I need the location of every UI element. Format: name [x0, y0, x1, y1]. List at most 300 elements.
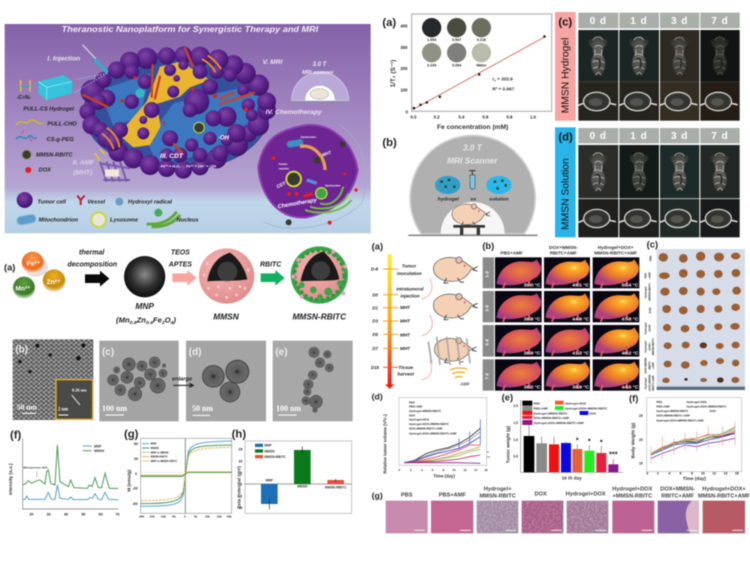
- panel c: MMSN hydrogel scans: (c): [558, 17, 572, 29]
- thermal image grid b: 38.9 °C: [572, 385, 589, 391]
- panel d: MMSN solution scans: [555, 127, 740, 237]
- metal ions: [13, 252, 65, 299]
- chart e: tumor weight: Hydrogel+DOX+MMSN-RBITC+AMF: [534, 421, 584, 425]
- chart g: magnetization: -15k: [149, 514, 155, 518]
- chart g: magnetization: MNP in MMSN: [151, 450, 169, 454]
- chart d: relative tumor volume: Hydrogel+MMSN-RBITC: [409, 409, 441, 413]
- chart h: zeta potential: -5: [239, 495, 242, 499]
- chart g: magnetization: MNP in MMSN-RBITC: [151, 459, 178, 463]
- chart h: zeta potential: 15: [238, 448, 242, 452]
- thermal image grid b: 47.8 °C: [622, 316, 639, 322]
- chart f: body weight: 0: [646, 472, 648, 476]
- chart f: XRD: MMSN: [94, 449, 105, 453]
- histology g: DOX: [535, 491, 547, 497]
- chart d: relative tumor volume: Time (day): [433, 474, 455, 479]
- histology g: Hydrogel+DOX+: [702, 486, 746, 492]
- chart d: relative tumor volume: Hydrogel+DOX+MMSN-RBITC+AMF: [409, 431, 457, 435]
- chart e: tumor weight: 1.0: [513, 438, 518, 442]
- legend: hydrogel components: -C=N-: [17, 95, 31, 101]
- chart d: relative tumor volume: PBS: [409, 400, 415, 404]
- timeline a: MHT: [400, 305, 411, 310]
- chart f: body weight: (f): [629, 394, 638, 404]
- chart g: magnetization: [124, 429, 232, 518]
- panel d: MMSN solution scans: 7 d: [711, 131, 729, 142]
- timeline a: harvest: [397, 372, 414, 377]
- histology g: RBITC+AMF: [661, 494, 695, 500]
- histology g: (g): [372, 490, 383, 500]
- mouse illustrations: [422, 257, 478, 387]
- chart e: tumor weight: *: [576, 435, 579, 444]
- chart f: body weight: DOX: [710, 409, 716, 413]
- panel c: MMSN hydrogel scans: 3 d: [671, 16, 688, 27]
- MNP sphere: O: [165, 315, 171, 324]
- thermal image grid b: 46.2 °C: [622, 350, 639, 356]
- MNP sphere: MNP: [135, 301, 154, 311]
- histology g: PBS: [401, 493, 413, 499]
- tumor photo c: MMSN-RBITC: [651, 338, 655, 355]
- step: thermal decomposition: decomposition: [67, 262, 117, 269]
- panel d: MMSN solution scans: 3 d: [671, 131, 688, 142]
- tumor photo c: -RBITC+AMF: [651, 375, 655, 391]
- thermal image grid b: MMSN-RBITC+AMF: [594, 250, 637, 255]
- chart h: zeta potential: 10: [238, 460, 242, 464]
- chart g: magnetization: MNP: [151, 442, 157, 446]
- step labels: (MHT): [73, 169, 93, 176]
- panel c: MMSN hydrogel scans: 7 d: [711, 16, 729, 27]
- chart a: relaxivity: Fe concentration (mM): [437, 124, 508, 131]
- tumor photo c: (c): [647, 240, 658, 250]
- MNP sphere: 4: [170, 320, 174, 326]
- chart f: body weight: Hydrogel+DOX+MMSN-RBITC: [687, 404, 727, 408]
- MMSN particle: [199, 248, 254, 322]
- chart d: relative tumor volume: 16: [484, 468, 488, 472]
- chart f: body weight: PBS: [656, 400, 662, 404]
- chart g: magnetization: MMSN: [151, 446, 159, 450]
- chart h: zeta potential: -10: [237, 506, 242, 510]
- chart h: zeta potential: 0: [240, 483, 242, 487]
- chart e: tumor weight: Hydrogel+MMSN-RBITC: [534, 411, 568, 415]
- legend: cell components: Vessel: [87, 199, 105, 205]
- chart a: relaxivity: R² = 0.997: [492, 87, 515, 92]
- label a: (a): [4, 263, 15, 273]
- timeline a: [371, 242, 424, 389]
- thermal image grid b: 1 d: [484, 271, 489, 277]
- chart d: relative tumor volume: Relative tumor volume (V/V₀): [382, 414, 387, 474]
- chart a: relaxivity: (a): [382, 17, 396, 29]
- step labels: III. CDT: [160, 153, 184, 160]
- chart a: relaxivity: 0.0: [410, 115, 417, 120]
- MNP sphere: 0.4: [146, 320, 153, 326]
- chart e: tumor weight: PBS: [534, 401, 540, 405]
- MNP sphere: Zn: [136, 315, 146, 324]
- chart d: relative tumor volume: 14: [474, 468, 478, 472]
- chart d: relative tumor volume: **: [487, 450, 490, 454]
- chart g: magnetization: 20k: [227, 514, 232, 518]
- thermal image grid b: 38.8 °C: [524, 316, 541, 322]
- tumor photo c: +DOX+: [647, 342, 651, 351]
- chart e: tumor weight: DOX: [590, 411, 596, 415]
- histology g: Hydrogel+DOX: [612, 486, 653, 492]
- panel: MRI results: [382, 12, 740, 237]
- timeline a: MHT: [400, 332, 411, 337]
- icon: syringe: [73, 45, 107, 93]
- tumor illustration: ·OH: [218, 135, 230, 141]
- histology g: DOX+MMSN-: [660, 486, 695, 492]
- chart h: zeta potential: (h): [232, 429, 246, 441]
- title: Theranostic Nanoplatform for Synergistic Therapy and MRI: [62, 24, 319, 34]
- chart f: body weight: DOX+MMSN-RBITC+AMF: [656, 414, 690, 418]
- metal ions: Fe³⁺: [27, 260, 41, 267]
- chart d: relative tumor volume: ***: [487, 455, 491, 459]
- panel c: MMSN hydrogel scans: 0 d: [590, 16, 607, 27]
- TEM image e: [273, 341, 353, 421]
- chart d: relative tumor volume: DOX: [409, 413, 415, 417]
- icon: MRI scanner dome: [290, 62, 349, 102]
- timeline a: D3: [372, 319, 378, 324]
- chart g: magnetization: 0: [184, 514, 186, 518]
- thermal image grid b: 7 d: [484, 373, 489, 379]
- chart f: XRD: (f): [10, 429, 22, 441]
- chart g: magnetization: 60: [134, 442, 138, 446]
- panel c: MMSN hydrogel scans: 1 d: [630, 16, 648, 27]
- chart a: relaxivity: 0.4: [458, 115, 465, 120]
- step: RBITC: [260, 262, 285, 286]
- chart d: relative tumor volume: 6: [432, 468, 434, 472]
- chart f: body weight: 8: [691, 472, 693, 476]
- timeline a: Tissue: [398, 365, 413, 370]
- chart d: relative tumor volume: 12: [463, 468, 467, 472]
- step: thermal decomposition: [67, 250, 117, 287]
- chart g: magnetization: (g): [124, 429, 139, 441]
- chart a: relaxivity: 0.8: [506, 115, 513, 120]
- chart a: relaxivity: 0.109: [427, 63, 436, 67]
- chart d: relative tumor volume: 4: [421, 468, 423, 472]
- chart f: body weight: Time (day): [683, 476, 706, 481]
- legend: hydrogel components: [16, 95, 77, 174]
- tumor illustration: [79, 46, 276, 179]
- TEM image e: 100 nm: [276, 404, 301, 413]
- step: TEOS APTES: [168, 250, 197, 286]
- chart a: relaxivity: 0: [406, 109, 409, 114]
- chart g: magnetization: -20: [132, 487, 138, 491]
- chart d: relative tumor volume: Hydrogel+DOX: [409, 418, 429, 422]
- chart a: relaxivity: 300: [400, 45, 408, 50]
- chart d: relative tumor volume: (d): [372, 392, 383, 402]
- enlarge arrow: [172, 376, 193, 387]
- tumor cell close-up: MHT: [321, 150, 332, 158]
- thermal image grid b: 50.4 °C: [622, 282, 639, 288]
- chart f: XRD: Intensity (a.u.): [8, 463, 13, 495]
- tumor cell close-up: Fenton: [279, 162, 288, 166]
- chart f: body weight: Hydrogel+DOX+MMSN-RBITC+AMF: [656, 419, 704, 423]
- step: TEOS APTES: APTES: [168, 262, 192, 269]
- chart f: XRD: 30: [47, 512, 51, 516]
- diagram b: MRI scanner: (b): [382, 137, 397, 149]
- legend: cell components: Hydroxyl radical: [128, 199, 172, 205]
- chart g: magnetization: 0: [135, 472, 137, 476]
- tumor photo c: [644, 240, 745, 392]
- chart a: relaxivity: 1.0: [530, 115, 537, 120]
- legend: hydrogel components: PULL-CHO: [47, 122, 77, 128]
- panel c: MMSN hydrogel scans: [555, 12, 740, 121]
- step labels: II. AMF: [73, 159, 95, 166]
- legend: cell components: Nucleus: [177, 217, 199, 223]
- timeline a: MHT: [400, 319, 411, 324]
- chart a: relaxivity: [382, 14, 552, 131]
- chart f: body weight: 6: [680, 472, 682, 476]
- chart e: tumor weight: 2.0: [513, 404, 518, 408]
- thermal image grid b: RBITC+AMF: [550, 250, 577, 255]
- chart d: relative tumor volume: 2: [410, 468, 412, 472]
- chart a: relaxivity: 200: [400, 66, 408, 71]
- chart a: relaxivity: Water: [476, 63, 487, 67]
- chart g: magnetization: M (emu/g): [127, 469, 132, 492]
- histology g: +MMSN-RBITC: [612, 494, 652, 500]
- TEM image d: [186, 341, 266, 421]
- chart g: magnetization: 20: [134, 457, 138, 461]
- tumor photo c: PBS: [649, 255, 653, 261]
- metal ions: Mn²⁺: [15, 286, 31, 293]
- histology g: Hydrogel+: [484, 486, 512, 492]
- timeline a: D5: [372, 332, 378, 337]
- chart f: XRD: 60: [99, 512, 103, 516]
- chart a: relaxivity: 0.218: [477, 38, 486, 42]
- legend: cell components: Tumor cell: [37, 199, 66, 205]
- timeline a: Intratumoral: [396, 287, 424, 292]
- chart h: zeta potential: [232, 429, 352, 513]
- diagram b: MRI scanner: [382, 135, 538, 235]
- panel: theranostic nanoplatform schematic: [5, 24, 371, 233]
- chart e: tumor weight: PBS+AMF: [534, 406, 548, 410]
- timeline a: injection: [400, 294, 420, 299]
- chart f: XRD: 20: [29, 512, 33, 516]
- icon: AMF coil: [95, 149, 130, 182]
- chart a: relaxivity: 0.054: [452, 63, 462, 67]
- tumor cell close-up: Dysfunction: [301, 135, 316, 139]
- legend: cell components: Lysosome: [110, 217, 138, 223]
- chart d: relative tumor volume: 0: [398, 468, 400, 472]
- tumor cell close-up: Chemotherapy: [277, 197, 318, 210]
- chart h: zeta potential: MMSN: [297, 485, 308, 489]
- chart e: tumor weight: ***: [609, 450, 618, 459]
- metal ions: Zn²⁺: [47, 279, 61, 286]
- diagram b: MRI scanner: solution: [489, 197, 509, 203]
- diagram b: MRI scanner: 3.0 T: [463, 143, 483, 153]
- chart f: XRD: 40: [64, 512, 68, 516]
- panel: TEM images and characterization: [8, 339, 353, 518]
- chart f: body weight: 14: [724, 472, 728, 476]
- chart a: relaxivity: 0.6: [482, 115, 489, 120]
- MNP sphere: (Mn: [116, 315, 130, 324]
- chart f: body weight: [629, 394, 742, 481]
- chart a: relaxivity: 0.547: [452, 38, 461, 42]
- step: thermal decomposition: thermal: [79, 250, 105, 257]
- thermal image grid b: [482, 241, 639, 391]
- chart g: magnetization: -60: [132, 502, 138, 506]
- chart f: body weight: 2: [657, 472, 659, 476]
- tumor photo c: +AMF: [647, 272, 651, 279]
- chart d: relative tumor volume: 8: [443, 468, 445, 472]
- diagram b: MRI scanner: vs: [471, 197, 476, 203]
- chart e: tumor weight: [502, 392, 623, 481]
- chart h: zeta potential: 5: [240, 471, 242, 475]
- panel d: MMSN solution scans: 0 d: [590, 131, 607, 142]
- TEM image b: [13, 339, 93, 420]
- chart g: magnetization: MMSN-RBITC: [151, 455, 168, 459]
- step labels: V. MRI: [263, 59, 283, 66]
- enlarge arrow: enlarge: [172, 376, 192, 382]
- tumor photo c: +MMSN-RBITC: [647, 283, 651, 302]
- TEM image b: (b): [15, 344, 28, 355]
- histology g: [372, 486, 750, 533]
- chart f: body weight: 10: [701, 472, 705, 476]
- chart g: magnetization: 5k: [194, 514, 198, 518]
- chart e: tumor weight: DOX+MMSN-RBITC+AMF: [534, 416, 569, 420]
- chart f: body weight: 15: [639, 461, 643, 465]
- step labels: IV. Chemotherapy: [266, 109, 322, 116]
- panel: treatment timeline and thermal imaging: [371, 240, 745, 392]
- tumor photo c: +AMF: [651, 362, 655, 369]
- chart a: relaxivity: 1/T₂ (S⁻¹): [390, 60, 397, 87]
- timeline a: D1: [372, 305, 378, 310]
- thermal image grid b: 44.5 °C: [622, 385, 639, 391]
- tumor photo c: Hydrogel: [644, 322, 648, 334]
- MNP sphere: 0.6: [130, 320, 137, 326]
- tumor cell close-up: CDT: [276, 180, 287, 189]
- chart f: body weight: 12: [712, 472, 716, 476]
- chart e: tumor weight: Tumor weight (g): [506, 425, 511, 463]
- chart g: magnetization: -5k: [171, 514, 176, 518]
- chart e: tumor weight: Hydrogel+DOX: [565, 401, 586, 405]
- panel d: MMSN solution scans: MMSN Solution: [561, 158, 572, 230]
- tumor photo c: DOX: [648, 307, 652, 313]
- step labels: Fe²⁺ + H₂O₂ → Fe³⁺ + OH⁻ + ·OH: [161, 164, 216, 168]
- step: TEOS APTES: TEOS: [171, 250, 190, 257]
- TEM image c: 100 nm: [102, 404, 127, 413]
- chart d: relative tumor volume: [372, 392, 491, 479]
- chart a: relaxivity: 0.2: [434, 115, 440, 120]
- chart d: relative tumor volume: DOX+MMSN-RBITC+AMF: [409, 426, 443, 430]
- chart a: relaxivity: 400: [400, 23, 408, 28]
- mouse illustrations: AMF: [459, 382, 470, 387]
- chart g: magnetization: 15k: [217, 514, 222, 518]
- tumor photo c: Hydrogel: [644, 377, 648, 389]
- legend: hydrogel components: PULL-CS Hydrogel: [23, 106, 74, 112]
- panel d: MMSN solution scans: 1 d: [630, 131, 648, 142]
- chart f: XRD: [8, 429, 119, 516]
- step: RBITC: RBITC: [260, 262, 282, 269]
- MMSN particle: MMSN: [213, 312, 240, 322]
- thermal image grid b: 38.9 °C: [524, 350, 541, 356]
- tumor photo c: DOX+MMSN: [644, 358, 648, 373]
- chart e: tumor weight: (e): [502, 392, 513, 402]
- chart a: relaxivity: 1.094: [427, 38, 437, 42]
- chart h: zeta potential: Zeta Potential (mV): [237, 466, 242, 508]
- chart f: body weight: 25: [639, 414, 643, 418]
- TEM image b: 2 nm: [58, 407, 68, 412]
- TEM image d: 50 nm: [192, 404, 213, 413]
- diagram b: MRI scanner: MRI Scanner: [447, 155, 498, 165]
- TEM image e: (e): [275, 347, 288, 358]
- timeline a: D0: [372, 292, 378, 297]
- icon: MRI scanner dome: 3.0 T: [313, 62, 328, 68]
- histology g: MMSN-RBITC+AMF: [698, 494, 750, 500]
- chart f: XRD: 70: [115, 512, 119, 516]
- chart h: zeta potential: MNP: [266, 479, 274, 483]
- chart f: body weight: Body Weight (g): [630, 422, 635, 458]
- MMSN-RBITC particle: [291, 246, 348, 322]
- chart d: relative tumor volume: PBS+AMF: [409, 405, 423, 409]
- thermal image grid b: 44.6 °C: [572, 316, 589, 322]
- step labels: I. Injection: [47, 56, 80, 63]
- panel d: MMSN solution scans: (d): [558, 132, 573, 144]
- MNP sphere: ): [172, 315, 176, 324]
- step labels: [47, 56, 322, 176]
- histology g: MMSN-RBITC: [479, 494, 516, 500]
- chart e: tumor weight: *: [588, 436, 591, 445]
- chart d: relative tumor volume: Hydrogel+DOX+MMSN-RBITC: [409, 422, 449, 426]
- thermal image grid b: DOX+MMSN-: [549, 245, 578, 250]
- chart g: magnetization: -20k: [138, 514, 145, 518]
- chart h: zeta potential: MMSN-RBITC: [264, 455, 286, 459]
- tumor cell close-up: [258, 125, 366, 228]
- tumor photo c: +DOX: [647, 324, 651, 332]
- thermal image grid b: 49.1 °C: [572, 282, 589, 288]
- chart f: body weight: Hydrogel+DOX: [687, 400, 707, 404]
- legend: hydrogel components: CS-g-PEG: [47, 137, 74, 143]
- timeline a: Tumor: [402, 264, 417, 269]
- chart a: relaxivity: = 303.9: [496, 77, 513, 82]
- MNP sphere: 2: [161, 320, 165, 326]
- chart d: relative tumor volume: 10: [452, 468, 456, 472]
- thermal image grid b: 3 d: [484, 305, 489, 311]
- chart h: zeta potential: MNP: [264, 444, 273, 448]
- chart f: body weight: PBS+AMF: [656, 404, 670, 408]
- diagram b: MRI scanner: hydrogel: [438, 197, 459, 203]
- timeline a: D15: [371, 365, 380, 370]
- chart f: body weight: 16: [735, 472, 739, 476]
- TEM image b: 50 nm: [17, 402, 37, 411]
- histology g: PBS+AMF: [439, 493, 466, 499]
- tumor cell close-up: reaction: [279, 166, 289, 170]
- chart e: tumor weight: 1.5: [513, 421, 518, 425]
- chart f: body weight: 4: [668, 472, 670, 476]
- chart h: zeta potential: MMSN-RBITC: [325, 485, 347, 489]
- MMSN-RBITC particle: MMSN-RBITC: [292, 312, 347, 322]
- chart f: XRD: MNP: [94, 444, 102, 448]
- chart e: tumor weight: *: [600, 437, 603, 446]
- tumor photo c: Hydrogel: [644, 341, 648, 352]
- tumor photo c: PBS: [644, 273, 648, 278]
- chart e: tumor weight: 0.5: [513, 455, 518, 459]
- chart f: XRD: Mesoporous SiO₂: [23, 465, 49, 469]
- panel: nanoparticle synthesis scheme: [4, 246, 348, 326]
- timeline a: (a): [372, 242, 383, 252]
- chart e: tumor weight: 15 th day: [562, 476, 582, 481]
- panel: therapeutic outcome charts: [372, 392, 750, 533]
- chart e: tumor weight: Hydrogel+DOX+MMSN-RBITC: [565, 406, 608, 410]
- thermal image grid b: PBS+AMF: [500, 250, 523, 255]
- timeline a: D-8: [371, 267, 379, 272]
- tumor photo c: -RBITC: [647, 361, 651, 370]
- tumor cell close-up: Dysfunction: [325, 184, 341, 188]
- legend: hydrogel components: DOX: [39, 168, 52, 174]
- timeline a: MHT: [400, 346, 411, 351]
- chart f: body weight: 20: [639, 438, 643, 442]
- legend: hydrogel components: MMSN-RBITC: [36, 153, 73, 159]
- TEM image c: [99, 341, 179, 421]
- chart g: magnetization: 10k: [205, 514, 210, 518]
